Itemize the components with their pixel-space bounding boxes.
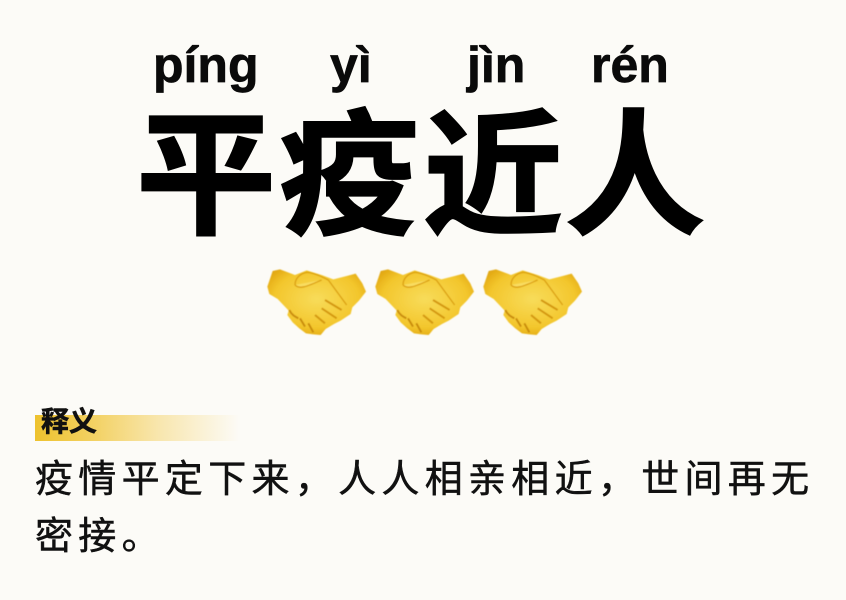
definition text: 疫情平定下来，人人相亲相近，世间再无: [35, 448, 814, 503]
icon: handshake 1: [267, 269, 366, 335]
icon: handshake 3: [483, 269, 582, 335]
section label: shiyi: [35, 400, 231, 441]
title: [136, 67, 705, 263]
pinyin: jin: jìn: [467, 37, 525, 93]
definition text: [35, 448, 814, 560]
pinyin row: [153, 37, 669, 93]
icon: handshake 2: [375, 269, 474, 335]
title: 近: [423, 67, 563, 263]
pinyin: ping: píng: [153, 37, 259, 93]
title: 人: [565, 67, 705, 263]
title: 疫: [279, 67, 419, 263]
title: 平: [136, 67, 276, 263]
definition text: 密接。: [35, 505, 165, 560]
pinyin: ren: rén: [591, 37, 669, 93]
label text: 释义: [41, 400, 97, 440]
pinyin: yi: yì: [330, 37, 372, 93]
highlight bar: [35, 415, 240, 441]
